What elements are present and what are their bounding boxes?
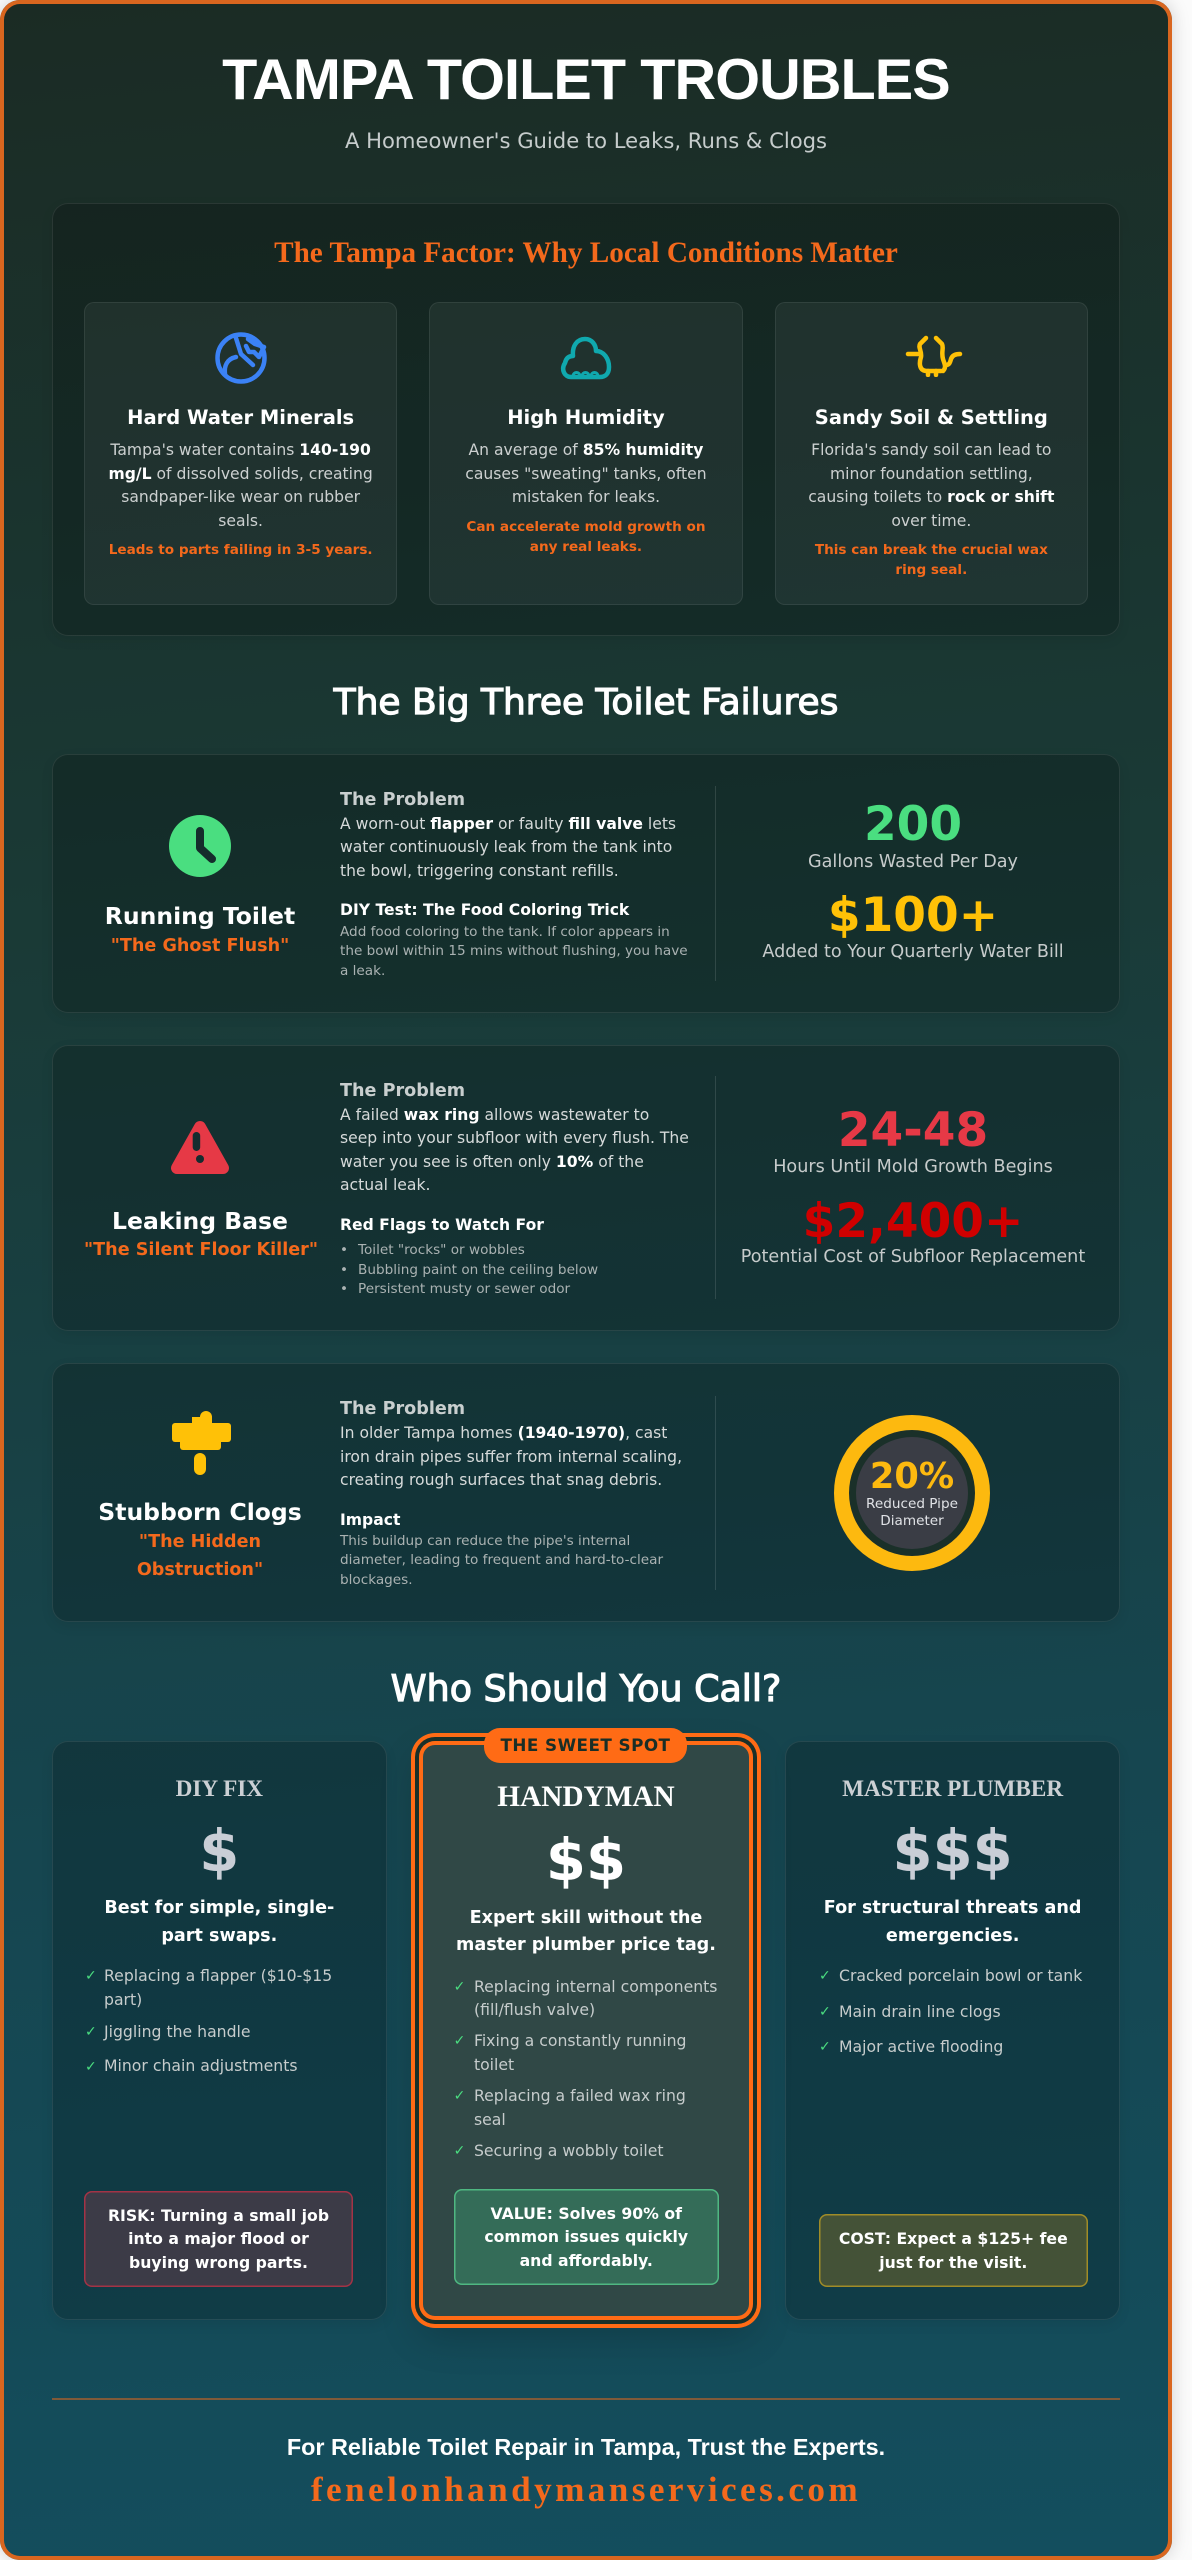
check list: Jiggling the handle [104, 2022, 251, 2040]
card note: any real leaks. [530, 538, 642, 554]
risk callout: buying wrong parts. [129, 2253, 308, 2272]
problem text: water you see is often only 10% of the [340, 1153, 644, 1171]
check list [85, 1966, 332, 2075]
section heading: who to call: Who Should You Call? [391, 1666, 781, 1710]
impact text: diameter, leading to frequent and hard-to-clear [340, 1552, 663, 1568]
check list: toilet [474, 2055, 514, 2074]
card text: sandpaper-like wear on rubber [121, 488, 360, 506]
option summary: master plumber price tag. [456, 1935, 716, 1955]
problem text: In older Tampa homes (1940-1970), cast [340, 1424, 667, 1442]
DIY test text [340, 924, 688, 979]
value callout [454, 2189, 719, 2285]
gauge value: 20% [870, 1456, 954, 1497]
check list: ✓ [85, 1968, 97, 1984]
icon: settling toilet [906, 336, 962, 377]
option summary: For structural threats and [824, 1898, 1082, 1918]
option title: MASTER PLUMBER [842, 1776, 1063, 1802]
check list: part) [104, 1990, 142, 2009]
problem text [340, 1106, 689, 1194]
check list: Replacing a failed wax ring [474, 2086, 686, 2105]
gauge label [866, 1496, 958, 1528]
card text: seals. [218, 512, 263, 530]
gauge label: Diameter [880, 1512, 944, 1528]
cost callout: COST: Expect a $125+ fee [839, 2229, 1068, 2248]
card note: Leads to parts failing in 3-5 years. [109, 542, 373, 558]
option price: $ [199, 1818, 239, 1885]
value callout: VALUE: Solves 90% of [491, 2204, 682, 2223]
factor card: sandy soil [775, 302, 1088, 605]
red flags list: Toilet "rocks" or wobbles [358, 1242, 525, 1258]
option summary [456, 1908, 716, 1955]
failure name: Stubborn Clogs [98, 1498, 302, 1526]
check list [819, 1966, 1082, 2056]
card text: Florida's sandy soil can lead to [811, 441, 1051, 459]
footer website: fenelonhandymanservices.com [311, 2470, 861, 2509]
card text: mistaken for leaks. [512, 488, 660, 506]
failure name: Leaking Base [112, 1207, 288, 1235]
icon: warning triangle [171, 1121, 229, 1174]
icon: cloud [560, 336, 612, 380]
stat label: Hours Until Mold Growth Begins [773, 1156, 1053, 1176]
red flags list: Bubbling paint on the ceiling below [358, 1262, 598, 1278]
stat label: Potential Cost of Subfloor Replacement [741, 1247, 1085, 1267]
failure nickname: "The Silent Floor Killer" [84, 1240, 318, 1260]
check list: Replacing a flapper ($10-$15 [104, 1966, 332, 1985]
problem heading: The Problem [340, 1399, 465, 1419]
panel: leaking base [52, 1045, 1120, 1331]
cost callout: just for the visit. [879, 2252, 1027, 2272]
section heading: big three: The Big Three Toilet Failures [334, 682, 838, 723]
problem text: creating rough surfaces that snag debris. [340, 1471, 662, 1489]
check list: ✓ [819, 1968, 831, 1984]
DIY test text: Add food coloring to the tank. If color appears in [340, 924, 670, 940]
value callout: common issues quickly [484, 2227, 688, 2246]
problem text: A worn-out flapper or faulty fill valve lets [340, 815, 676, 833]
card text: mg/L of dissolved solids, creating [108, 465, 373, 483]
impact text: blockages. [340, 1572, 413, 1588]
stat: water bill: $100+ [828, 888, 998, 943]
failure nickname: "The Hidden [139, 1532, 261, 1552]
problem text [340, 815, 676, 880]
check list: Fixing a constantly running [474, 2031, 686, 2050]
panel: stubborn clogs [52, 1363, 1120, 1622]
problem text: actual leak. [340, 1176, 430, 1194]
check list: Cracked porcelain bowl or tank [839, 1966, 1082, 1985]
option summary: emergencies. [886, 1926, 1019, 1946]
check list: ✓ [819, 2004, 831, 2020]
impact text [340, 1533, 664, 1588]
check list: ✓ [819, 2039, 831, 2055]
failure nickname: "The Ghost Flush" [111, 936, 289, 956]
risk callout [84, 2191, 353, 2287]
check list: Major active flooding [839, 2036, 1003, 2056]
option card: master plumber [785, 1741, 1120, 2320]
option summary: part swaps. [161, 1926, 277, 1946]
card note: This can break the crucial wax [815, 542, 1048, 558]
option summary: Best for simple, single- [104, 1898, 334, 1918]
DIY test text: the bowl within 15 mins without flushing, you have [340, 943, 688, 959]
badge [484, 1728, 687, 1763]
card title: Sandy Soil & Settling [815, 406, 1048, 429]
icon: clock [169, 815, 231, 877]
panel: running toilet [52, 754, 1120, 1012]
check list: ✓ [454, 2088, 465, 2104]
problem heading: The Problem [340, 1081, 465, 1101]
check list: Replacing internal components [474, 1977, 717, 1996]
option summary: Expert skill without the [470, 1908, 702, 1928]
problem text: seep into your subfloor with every flush. The [340, 1129, 689, 1147]
failure nickname [137, 1532, 263, 1580]
cost callout [819, 2214, 1088, 2287]
subtitle: A Homeowner's Guide to Leaks, Runs & Clogs [345, 128, 827, 152]
red flags list: Persistent musty or sewer odor [358, 1281, 570, 1297]
red flags list: • [340, 1262, 348, 1278]
card text: causes "sweating" tanks, often [465, 465, 707, 483]
card text: causing toilets to rock or shift [808, 488, 1054, 506]
option title: HANDYMAN [497, 1781, 675, 1813]
panel heading: The Tampa Factor: Why Local Conditions Matter [274, 237, 898, 269]
red flags list [340, 1242, 598, 1297]
risk callout: RISK: Turning a small job [108, 2206, 329, 2225]
card note [814, 542, 1048, 578]
failure name: Running Toilet [105, 902, 295, 930]
red flags list: • [340, 1242, 348, 1258]
check list: seal [474, 2110, 506, 2129]
check list: ✓ [454, 1979, 465, 1995]
problem text: the bowl, triggering constant refills. [340, 862, 619, 880]
problem text: iron drain pipes suffer from internal scaling, [340, 1448, 682, 1466]
stat label: Gallons Wasted Per Day [808, 852, 1018, 872]
value callout: and affordably. [520, 2251, 653, 2270]
check list: ✓ [454, 2143, 465, 2159]
card text: minor foundation settling, [830, 465, 1033, 483]
panel: the Tampa factor [52, 203, 1120, 636]
stat: replacement cost: $2,400+ [803, 1194, 1023, 1248]
option title: DIY FIX [176, 1776, 263, 1802]
icon: globe [215, 332, 267, 384]
card note [466, 519, 706, 554]
problem text: A failed wax ring allows wastewater to [340, 1106, 649, 1124]
card text [808, 441, 1054, 530]
card text: An average of 85% humidity [468, 441, 703, 459]
stat: mold hours: 24-48 [838, 1103, 988, 1158]
gauge: reduced pipe diameter [834, 1415, 990, 1571]
impact text: This buildup can reduce the pipe's internal [340, 1533, 630, 1549]
problem text: water continuously leak from the tank into [340, 838, 672, 856]
check list: (fill/flush valve) [474, 2000, 595, 2019]
failure nickname: Obstruction" [137, 1560, 263, 1580]
check list: ✓ [85, 2024, 97, 2040]
card title: Hard Water Minerals [127, 406, 354, 429]
check list: ✓ [85, 2059, 97, 2075]
DIY test heading: DIY Test: The Food Coloring Trick [340, 901, 629, 919]
problem heading: The Problem [340, 790, 465, 810]
footer tagline: For Reliable Toilet Repair in Tampa, Trust the Experts. [287, 2434, 885, 2460]
badge: THE SWEET SPOT [500, 1735, 670, 1755]
problem text [340, 1424, 682, 1489]
red flags list: • [340, 1281, 348, 1297]
factor card: humidity [429, 302, 743, 605]
card text [465, 441, 707, 506]
option price: $$$ [893, 1818, 1013, 1885]
risk callout: into a major flood or [128, 2229, 309, 2248]
card text [108, 441, 373, 530]
stat label: Added to Your Quarterly Water Bill [762, 942, 1064, 962]
check list: Securing a wobbly toilet [474, 2141, 663, 2160]
title: TAMPA TOILET TROUBLES [222, 48, 950, 112]
check list: Minor chain adjustments [104, 2056, 298, 2075]
factor card: hard water [84, 302, 397, 605]
check list [454, 1977, 717, 2160]
card text: Tampa's water contains 140-190 [110, 441, 371, 459]
check list: Main drain line clogs [839, 2002, 1001, 2020]
card note: ring seal. [895, 562, 967, 578]
icon: plunger [172, 1411, 231, 1475]
option price: $$ [546, 1827, 626, 1894]
gauge label: Reduced Pipe [866, 1496, 958, 1512]
option summary [104, 1898, 334, 1946]
card note: Can accelerate mold growth on [466, 519, 706, 535]
check list: ✓ [454, 2033, 465, 2049]
impact heading: Impact [340, 1511, 400, 1529]
DIY test text: a leak. [340, 963, 385, 979]
option card: handyman (highlighted) [419, 1741, 753, 2320]
option card: DIY fix [52, 1741, 387, 2320]
red flags heading: Red Flags to Watch For [340, 1216, 544, 1234]
card title: High Humidity [507, 406, 665, 429]
option summary [824, 1898, 1082, 1946]
stat: gallons: 200 [864, 797, 962, 852]
card text: over time. [891, 512, 971, 530]
